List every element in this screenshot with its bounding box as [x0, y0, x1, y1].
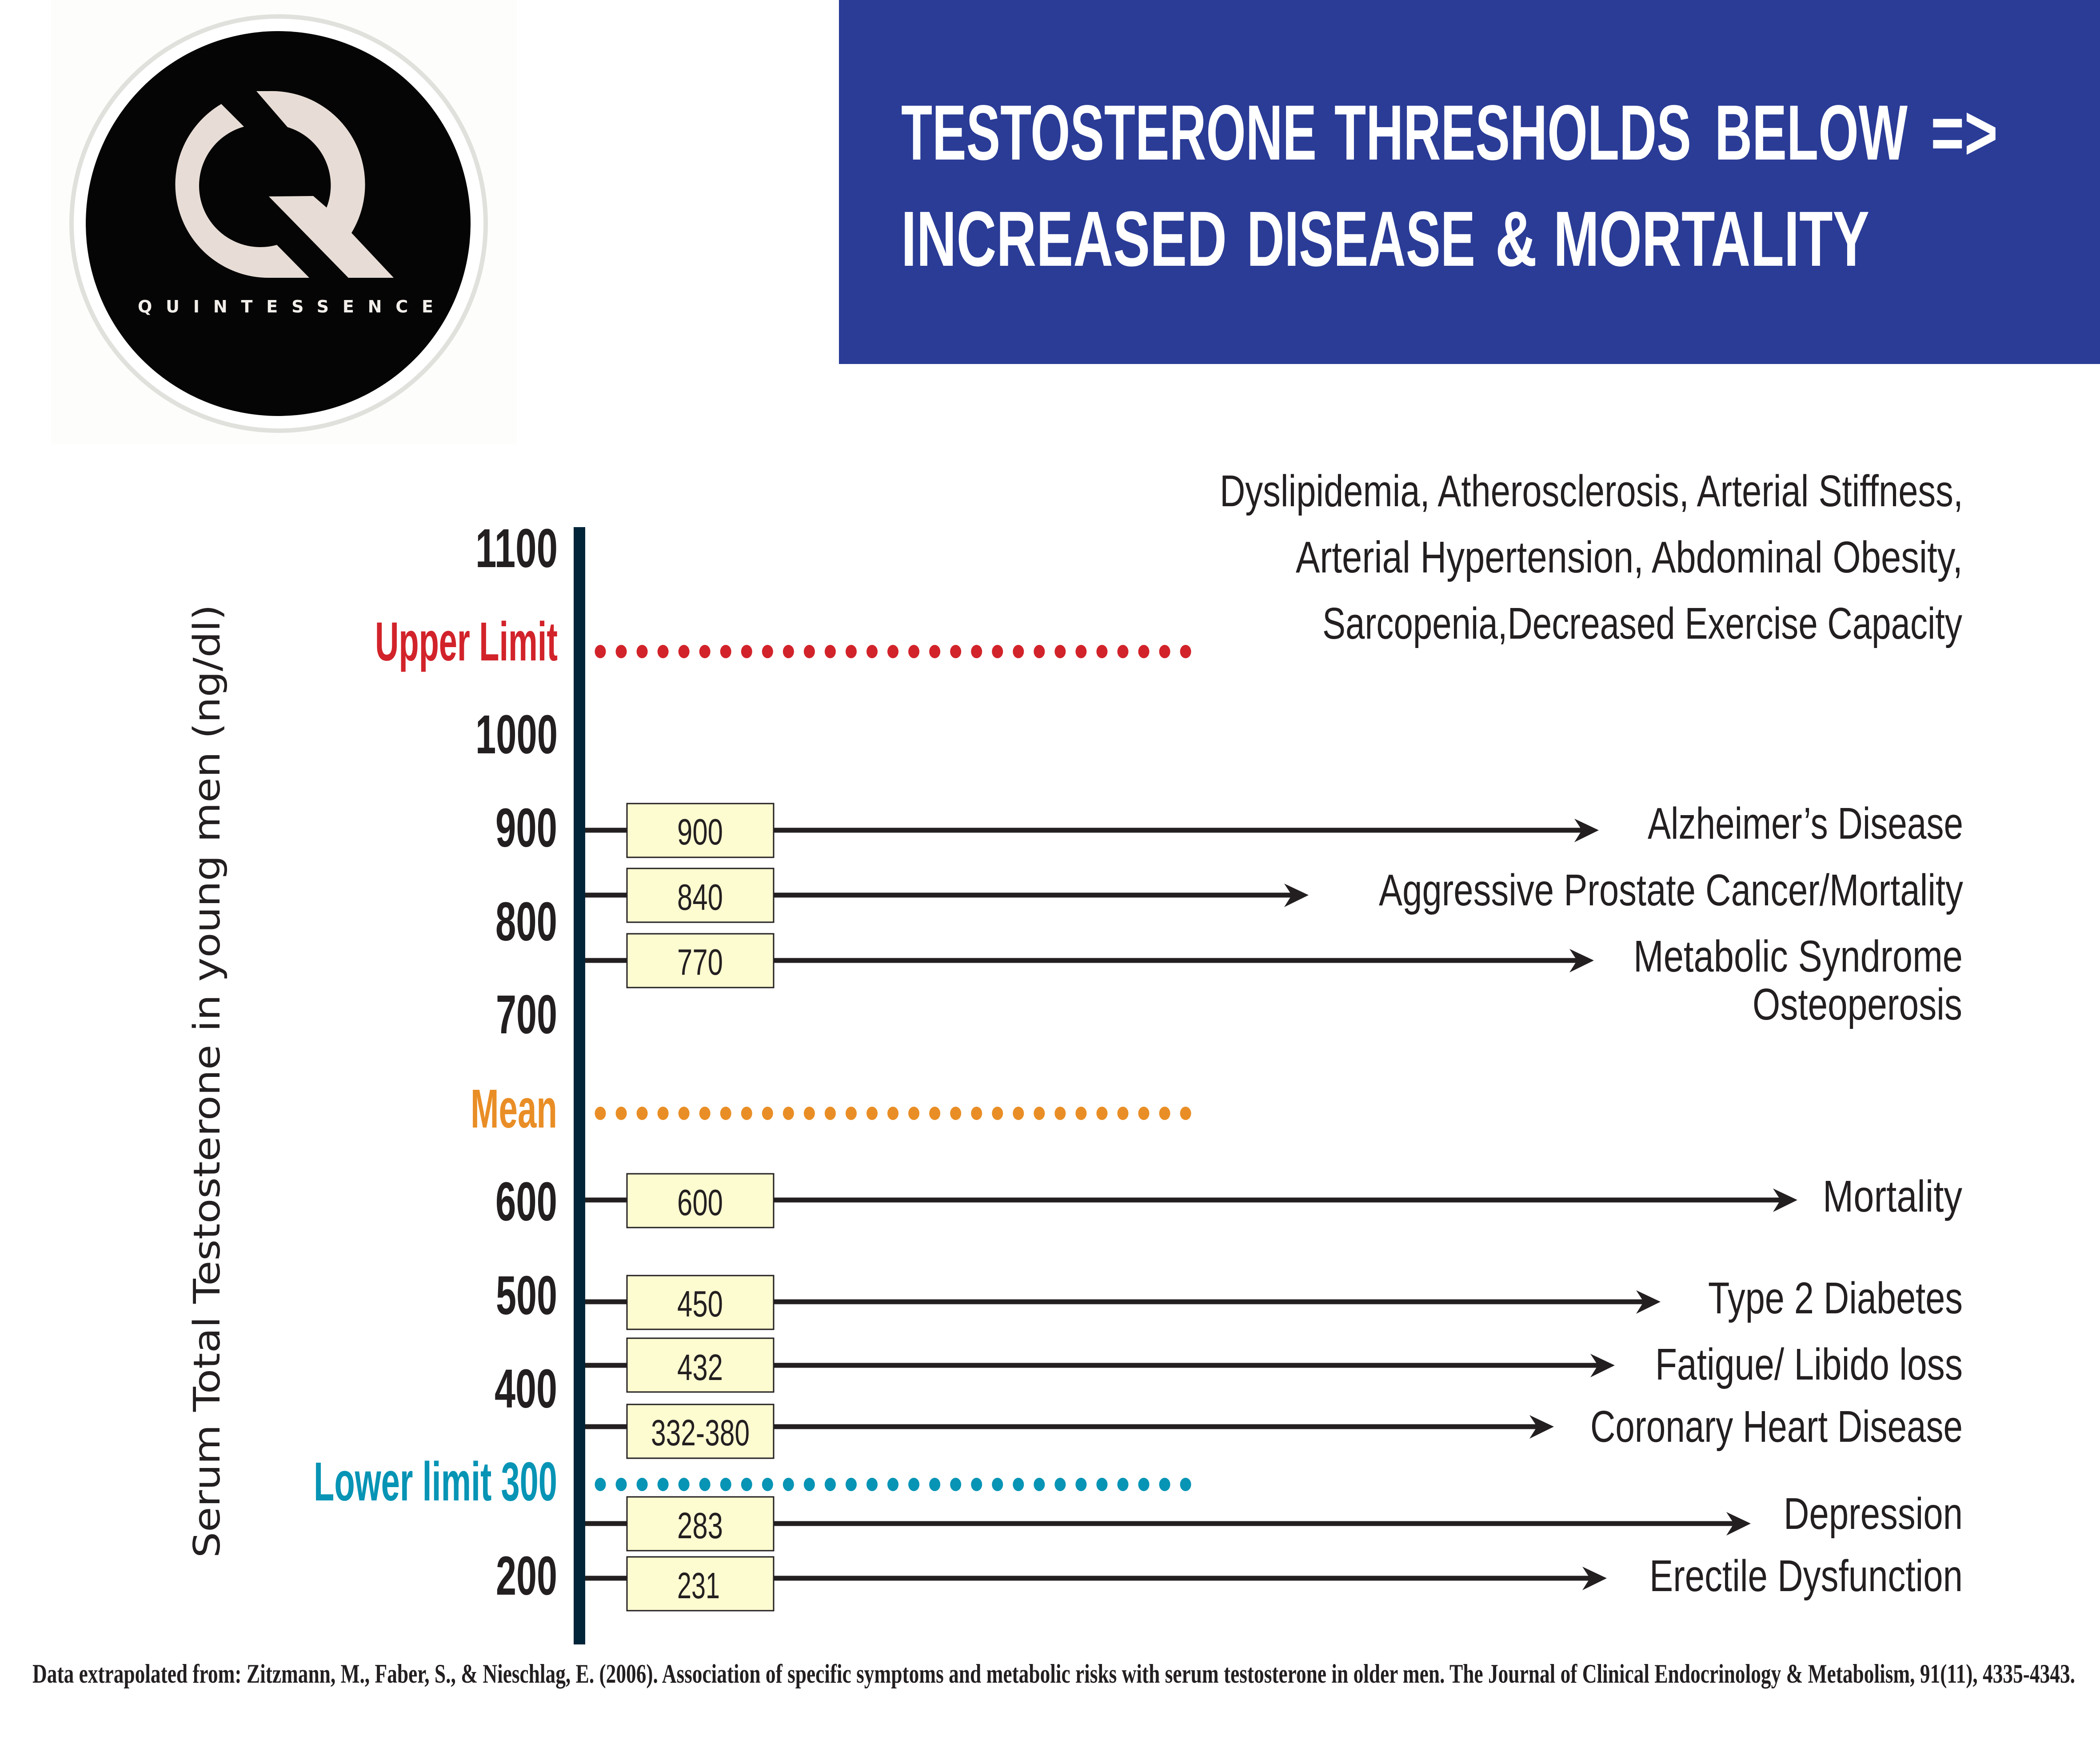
y-axis title: Serum Total Testosterone in young men (ng/dl): [186, 604, 228, 1558]
row: 450 Type 2 Diabetes: Type 2 Diabetes: [1708, 1273, 1963, 1323]
title banner: DISEASE: [1247, 196, 1475, 283]
row: 600 Mortality: 600: [677, 1182, 723, 1223]
title banner: MORTALITY: [1553, 196, 1869, 283]
axis scale labels: 200: [496, 1546, 557, 1607]
row: 432 Fatigue/Libido loss: [585, 1338, 1963, 1392]
row: 840 Aggressive Prostate Cancer/Mortality: Aggressive Prostate Cancer/Mortality: [1379, 865, 1963, 915]
row: 770 Metabolic Syndrome, Osteoperosis: [585, 932, 1963, 1029]
axis scale labels: 1000: [475, 704, 558, 765]
row: 283 Depression: 283: [677, 1505, 723, 1546]
axis scale labels: 1100: [475, 518, 558, 579]
title banner: [839, 0, 2100, 364]
top-right condition list: Arterial Hypertension, Abdominal Obesity,: [1296, 532, 1963, 582]
logo: Quintessence: [51, 0, 517, 444]
axis scale labels: [475, 518, 558, 1607]
row: 600 Mortality: Mortality: [1823, 1172, 1962, 1221]
title banner: &: [1495, 196, 1537, 283]
axis line: [574, 527, 585, 1644]
row: 332-380 Coronary Heart Disease: 332-380: [651, 1412, 750, 1453]
axis scale labels: 600: [495, 1172, 557, 1232]
row: 450 Type 2 Diabetes: 450: [677, 1283, 723, 1324]
row: 450 Type 2 Diabetes: [585, 1273, 1963, 1329]
row: 770 Metabolic Syndrome, Osteoperosis: Osteoperosis: [1753, 980, 1962, 1029]
title banner: BELOW: [1715, 89, 1908, 176]
title banner: =>: [1931, 89, 1998, 176]
title banner: TESTOSTERONE: [901, 89, 1317, 176]
lower limit marker: Lower limit 300: [314, 1452, 557, 1512]
row: 770 Metabolic Syndrome, Osteoperosis: Metabolic Syndrome: [1633, 932, 1963, 981]
row: 840 Aggressive Prostate Cancer/Mortality: 840: [677, 876, 723, 918]
row: 770 Metabolic Syndrome, Osteoperosis: 770: [677, 941, 723, 983]
title banner: INCREASED: [901, 196, 1227, 283]
row: 432 Fatigue/Libido loss: Fatigue/ Libido loss: [1655, 1340, 1963, 1389]
upper limit marker: Upper Limit: [375, 612, 558, 672]
row: 231 Erectile Dysfunction: Erectile Dysfunction: [1649, 1551, 1963, 1601]
row: 900 Alzheimer's Disease: [585, 799, 1963, 857]
row: 432 Fatigue/Libido loss: 432: [677, 1347, 723, 1388]
axis scale labels: 500: [496, 1265, 557, 1326]
row: 900 Alzheimer's Disease: 900: [677, 811, 723, 852]
row: 283 Depression: Depression: [1784, 1489, 1963, 1539]
title banner: THRESHOLDS: [1334, 89, 1691, 176]
logo: Quintessence: QUINTESSENCE: [138, 297, 433, 316]
row: 283 Depression: [585, 1489, 1963, 1551]
mean marker: Mean: [471, 1079, 557, 1140]
row: 332-380 Coronary Heart Disease: [585, 1402, 1963, 1458]
row: 332-380 Coronary Heart Disease: Coronary Heart Disease: [1590, 1402, 1963, 1452]
axis scale labels: 900: [495, 798, 557, 859]
axis scale labels: 700: [496, 984, 557, 1045]
row: 900 Alzheimer's Disease: Alzheimer’s Disease: [1648, 799, 1963, 848]
row: 231 Erectile Dysfunction: [585, 1551, 1963, 1611]
axis scale labels: 400: [495, 1359, 557, 1420]
axis scale labels: 800: [495, 892, 557, 952]
row: 600 Mortality: [585, 1172, 1962, 1228]
row: 231 Erectile Dysfunction: 231: [677, 1565, 720, 1606]
top-right condition list: [1220, 466, 1963, 648]
row: 840 Aggressive Prostate Cancer/Mortality: [585, 865, 1963, 922]
